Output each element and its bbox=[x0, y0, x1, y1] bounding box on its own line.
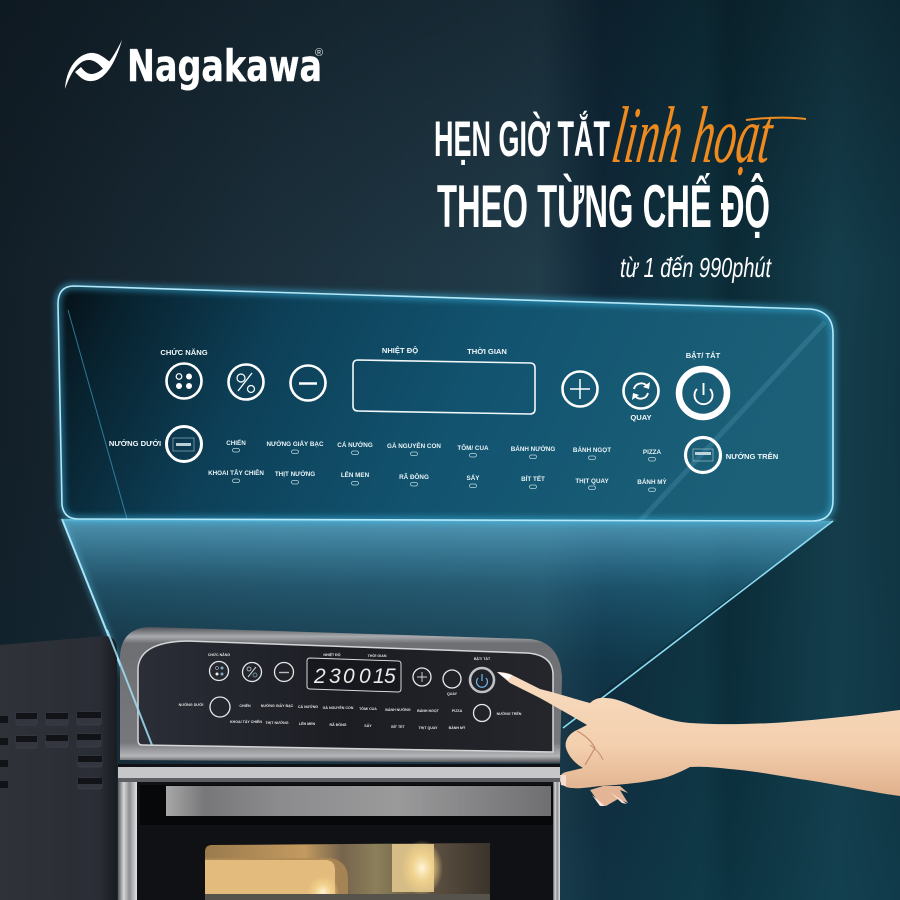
oven display: 230 015 bbox=[313, 665, 396, 688]
subtitle: từ 1 đến 990phút bbox=[620, 252, 772, 283]
oven labels: GÀ NGUYÊN CON bbox=[323, 705, 354, 710]
icon: rotate button bbox=[624, 374, 658, 408]
labels: main controls: QUAY bbox=[630, 413, 652, 422]
logo bbox=[65, 40, 323, 92]
display frame bbox=[353, 360, 535, 414]
curled fingers bbox=[577, 731, 628, 806]
script accent: linh hoạt bbox=[607, 91, 779, 180]
brand name: Nagakawa bbox=[127, 41, 322, 92]
labels: main controls: THỜI GIAN bbox=[467, 347, 507, 356]
mode labels: CÁ NƯỚNG bbox=[337, 440, 373, 449]
oven labels: NƯỚNG GIẤY BẠC bbox=[261, 703, 294, 708]
labels: main controls: NHIỆT ĐỘ bbox=[382, 346, 418, 355]
labels: main controls: NƯỚNG TRÊN bbox=[726, 452, 778, 461]
icon: function button bbox=[166, 364, 202, 398]
door handle bbox=[166, 786, 551, 816]
labels: main controls bbox=[109, 346, 778, 461]
projection beam bbox=[62, 519, 833, 745]
oven labels: KHOAI TÂY CHIÊN bbox=[230, 719, 262, 724]
panel glass bbox=[58, 286, 833, 521]
oven labels: THỊT QUAY bbox=[418, 726, 438, 730]
oven labels: CHỨC NĂNG bbox=[208, 652, 230, 657]
mode labels: BÁNH MỲ bbox=[637, 477, 667, 486]
mode labels: THỊT NƯỚNG bbox=[275, 469, 315, 478]
oven labels: NƯỚNG TRÊN bbox=[497, 711, 522, 716]
oven labels: NHIỆT ĐỘ bbox=[323, 652, 341, 657]
oven labels: PIZZA bbox=[452, 709, 463, 713]
mode labels: BÁNH NƯỚNG bbox=[511, 444, 555, 453]
oven labels: SẤY bbox=[364, 724, 372, 728]
control head frame bbox=[120, 627, 562, 763]
icon: plus button bbox=[562, 372, 598, 406]
icon: time and temperature button bbox=[228, 364, 264, 400]
oven labels: CÁ NƯỚNG bbox=[298, 704, 318, 709]
oven labels: THỊT NƯỚNG bbox=[265, 720, 289, 725]
mode labels: LÊN MEN bbox=[341, 470, 370, 479]
oven labels: BẬT/ TẮT bbox=[474, 656, 491, 661]
mode indicator lights bbox=[232, 448, 656, 492]
mode labels: KHOAI TÂY CHIÊN bbox=[208, 468, 264, 477]
icon: power button bbox=[679, 369, 727, 417]
control head black panel bbox=[138, 641, 553, 752]
mode labels: PIZZA bbox=[643, 449, 662, 456]
oven labels: QUAY bbox=[447, 692, 458, 696]
oven window bbox=[205, 840, 490, 900]
thumb nail bbox=[560, 775, 566, 786]
oven labels: LÊN MEN bbox=[299, 721, 315, 726]
oven buttons bbox=[210, 662, 494, 722]
mode labels: TÔM/ CUA bbox=[457, 443, 489, 452]
air fryer oven bbox=[0, 627, 562, 900]
mode labels: BÁNH NGỌT bbox=[573, 445, 611, 454]
mode labels: NƯỚNG GIẤY BẠC bbox=[266, 438, 324, 448]
mode labels: CHIẾN bbox=[226, 437, 246, 447]
labels: main controls: BẬT/ TẮT bbox=[686, 351, 721, 360]
hand pressing power button bbox=[497, 672, 900, 806]
mode labels: RÃ ĐÔNG bbox=[399, 472, 429, 481]
registered mark: ® bbox=[315, 47, 323, 59]
mode labels: THỊT QUAY bbox=[575, 478, 609, 485]
oven labels: THỜI GIAN bbox=[368, 653, 387, 658]
title bbox=[434, 91, 806, 283]
oven labels: TÔM/ CUA bbox=[359, 706, 377, 711]
icon: lower grill button bbox=[166, 426, 202, 462]
holographic control panel bbox=[58, 286, 833, 521]
script crossbar bbox=[746, 118, 806, 120]
arm and pointing finger bbox=[497, 672, 900, 796]
oven labels bbox=[179, 652, 522, 730]
oven labels: BÁNH NƯỚNG bbox=[385, 707, 411, 712]
labels: main controls: CHỨC NĂNG bbox=[160, 348, 208, 357]
icon: Nagakawa swoosh bbox=[65, 40, 122, 89]
mode labels bbox=[208, 437, 667, 486]
mode labels: GÀ NGUYÊN CON bbox=[387, 441, 441, 450]
beam line over panel bbox=[107, 630, 152, 745]
oven labels: BÁNH NGỌT bbox=[417, 708, 440, 713]
icon: minus button bbox=[290, 366, 326, 400]
fingernail bbox=[497, 672, 512, 680]
oven labels: BÁNH MỲ bbox=[449, 725, 466, 730]
oven door bbox=[118, 764, 560, 900]
mode labels: SẤY bbox=[467, 472, 480, 482]
oven labels: CHIÊN bbox=[239, 703, 251, 708]
mode labels: BÍT TẾT bbox=[521, 473, 545, 483]
icon: upper grill button bbox=[686, 438, 720, 472]
oven labels: RÃ ĐÔNG bbox=[330, 722, 347, 727]
oven labels: NƯỚNG DƯỚI bbox=[179, 702, 203, 707]
labels: main controls: NƯỚNG DƯỚI bbox=[109, 439, 161, 448]
oven labels: BÍT TẾT bbox=[391, 724, 406, 729]
oven side body bbox=[0, 636, 117, 900]
title line one: HẸN GIỜ TẮT bbox=[434, 111, 610, 167]
oven display bbox=[307, 658, 401, 692]
